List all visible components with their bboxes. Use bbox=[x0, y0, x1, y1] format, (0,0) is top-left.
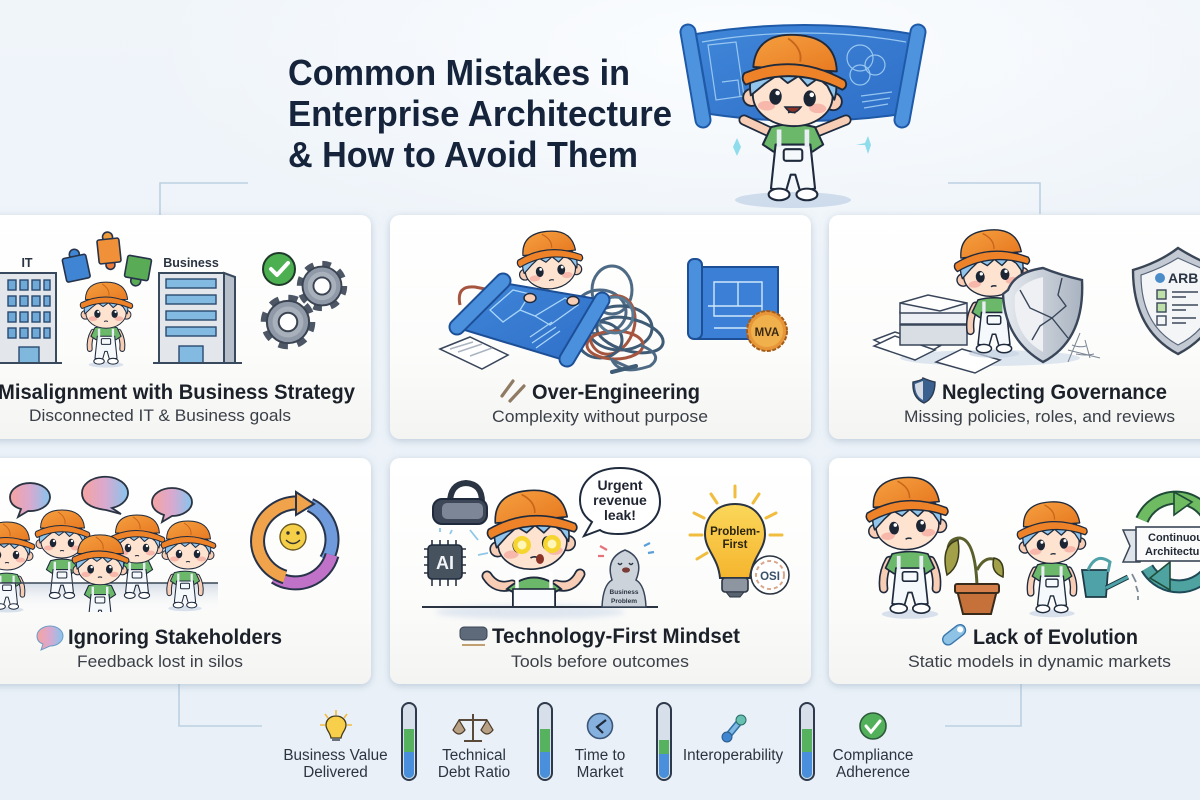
worker with wilted plant bbox=[863, 474, 1003, 619]
icon: IT building: IT bbox=[21, 256, 33, 270]
heading: Over-Engineering bbox=[532, 381, 700, 404]
icon: tools bbox=[502, 381, 524, 401]
icon: problem-first light bulb: Problem- bbox=[710, 526, 760, 538]
heading: Ignoring Stakeholders bbox=[68, 626, 282, 649]
icon: problem-first light bulb: First bbox=[723, 539, 748, 551]
metric: compliance adherence bbox=[833, 713, 913, 781]
illustration: worker with cracked shield and papers bbox=[874, 226, 1100, 373]
metric: technical debt ratio bbox=[438, 714, 510, 781]
icon: puzzle pieces bbox=[61, 231, 152, 288]
text: subtitle: Complexity without purpose bbox=[492, 407, 708, 426]
gauge 2 bbox=[538, 703, 552, 780]
figure: business problem bbox=[598, 543, 654, 607]
worker bbox=[80, 282, 133, 368]
illustration: worker with dazzled eyes bbox=[422, 487, 658, 619]
icon: problem-first light bulb bbox=[690, 486, 789, 597]
icon: continuous architecture loop bbox=[1123, 492, 1200, 590]
connector lines bbox=[160, 183, 1040, 726]
icon: check badge bbox=[263, 253, 295, 285]
illustration: worker with blueprint and tangled wires bbox=[440, 228, 667, 372]
figure: business problem: Business bbox=[610, 589, 639, 596]
panel: misalignment with business strategy bbox=[0, 215, 371, 439]
title bbox=[288, 52, 672, 175]
panel: lack of evolution bbox=[829, 458, 1200, 684]
hero worker holding blueprint bbox=[688, 25, 918, 208]
worker with watering can bbox=[1015, 499, 1138, 617]
icon: gears bbox=[265, 265, 343, 345]
panel: over-engineering bbox=[390, 215, 811, 439]
icon: feedback loop with smiley bbox=[258, 492, 332, 583]
icon: ARB shield: ARB bbox=[1168, 270, 1198, 286]
callout: urgent revenue leak: Urgent bbox=[597, 477, 643, 493]
panel: ignoring stakeholders bbox=[0, 458, 371, 684]
text: subtitle: Static models in dynamic markets bbox=[908, 652, 1171, 671]
metric: time to market: Market bbox=[577, 764, 624, 781]
icon: device bbox=[460, 627, 487, 645]
metric: compliance adherence: Adherence bbox=[836, 764, 910, 781]
KPI strip bbox=[283, 703, 913, 781]
metric: business value delivered: Business Value bbox=[283, 747, 388, 764]
icon: business building bbox=[153, 256, 242, 363]
metric: interoperability bbox=[683, 715, 784, 764]
text: subtitle: Tools before outcomes bbox=[511, 652, 689, 671]
icon: small shield bbox=[913, 378, 935, 403]
icon: speech bubble bbox=[37, 626, 63, 650]
heading: Lack of Evolution bbox=[973, 626, 1138, 649]
gauge 1 bbox=[402, 703, 416, 780]
figure: business problem: Problem bbox=[611, 598, 637, 605]
icon: ARB shield bbox=[1133, 248, 1200, 354]
metric: technical debt ratio: Technical bbox=[442, 747, 506, 764]
icon: AI chip bbox=[424, 528, 488, 586]
metric: compliance adherence: Compliance bbox=[833, 747, 913, 764]
icon: link bbox=[940, 622, 968, 647]
title: Common Mistakes in bbox=[288, 52, 630, 93]
heading: Misalignment with Business Strategy bbox=[0, 381, 355, 404]
text: subtitle: Disconnected IT & Business goals bbox=[29, 406, 291, 425]
text: subtitle: Feedback lost in silos bbox=[77, 652, 243, 671]
blueprint banner bbox=[688, 25, 918, 121]
title: Enterprise Architecture bbox=[288, 93, 672, 134]
gauge 4 bbox=[800, 703, 814, 780]
metric: interoperability: Interoperability bbox=[683, 747, 784, 764]
icon: MVA blueprint: MVA bbox=[755, 327, 779, 339]
metric: technical debt ratio: Debt Ratio bbox=[438, 764, 510, 781]
icon: business building: Business bbox=[163, 256, 219, 270]
callout: urgent revenue leak: leak! bbox=[604, 507, 636, 523]
panel: neglecting governance bbox=[829, 215, 1200, 439]
heading: Neglecting Governance bbox=[942, 381, 1167, 404]
icon: IT building bbox=[0, 256, 62, 363]
panel: technology-first mindset bbox=[390, 458, 811, 684]
icon: MVA blueprint bbox=[688, 259, 787, 351]
title: & How to Avoid Them bbox=[288, 134, 638, 175]
metric: business value delivered: Delivered bbox=[303, 764, 368, 781]
gauge 3 bbox=[657, 703, 671, 780]
icon: problem-first light bulb: OSI bbox=[760, 571, 780, 583]
callout: urgent revenue leak: revenue bbox=[593, 492, 647, 508]
heading: Technology-First Mindset bbox=[492, 625, 740, 648]
metric: business value delivered bbox=[283, 710, 388, 781]
callout: urgent revenue leak bbox=[580, 468, 660, 536]
metric: time to market bbox=[575, 714, 625, 781]
metric: time to market: Time to bbox=[575, 747, 625, 764]
text: subtitle: Missing policies, roles, and reviews bbox=[904, 407, 1175, 426]
icon: AI chip: AI bbox=[436, 553, 454, 573]
illustration: worker group with speech bubbles bbox=[0, 477, 218, 623]
icon: VR headset bbox=[433, 483, 487, 524]
